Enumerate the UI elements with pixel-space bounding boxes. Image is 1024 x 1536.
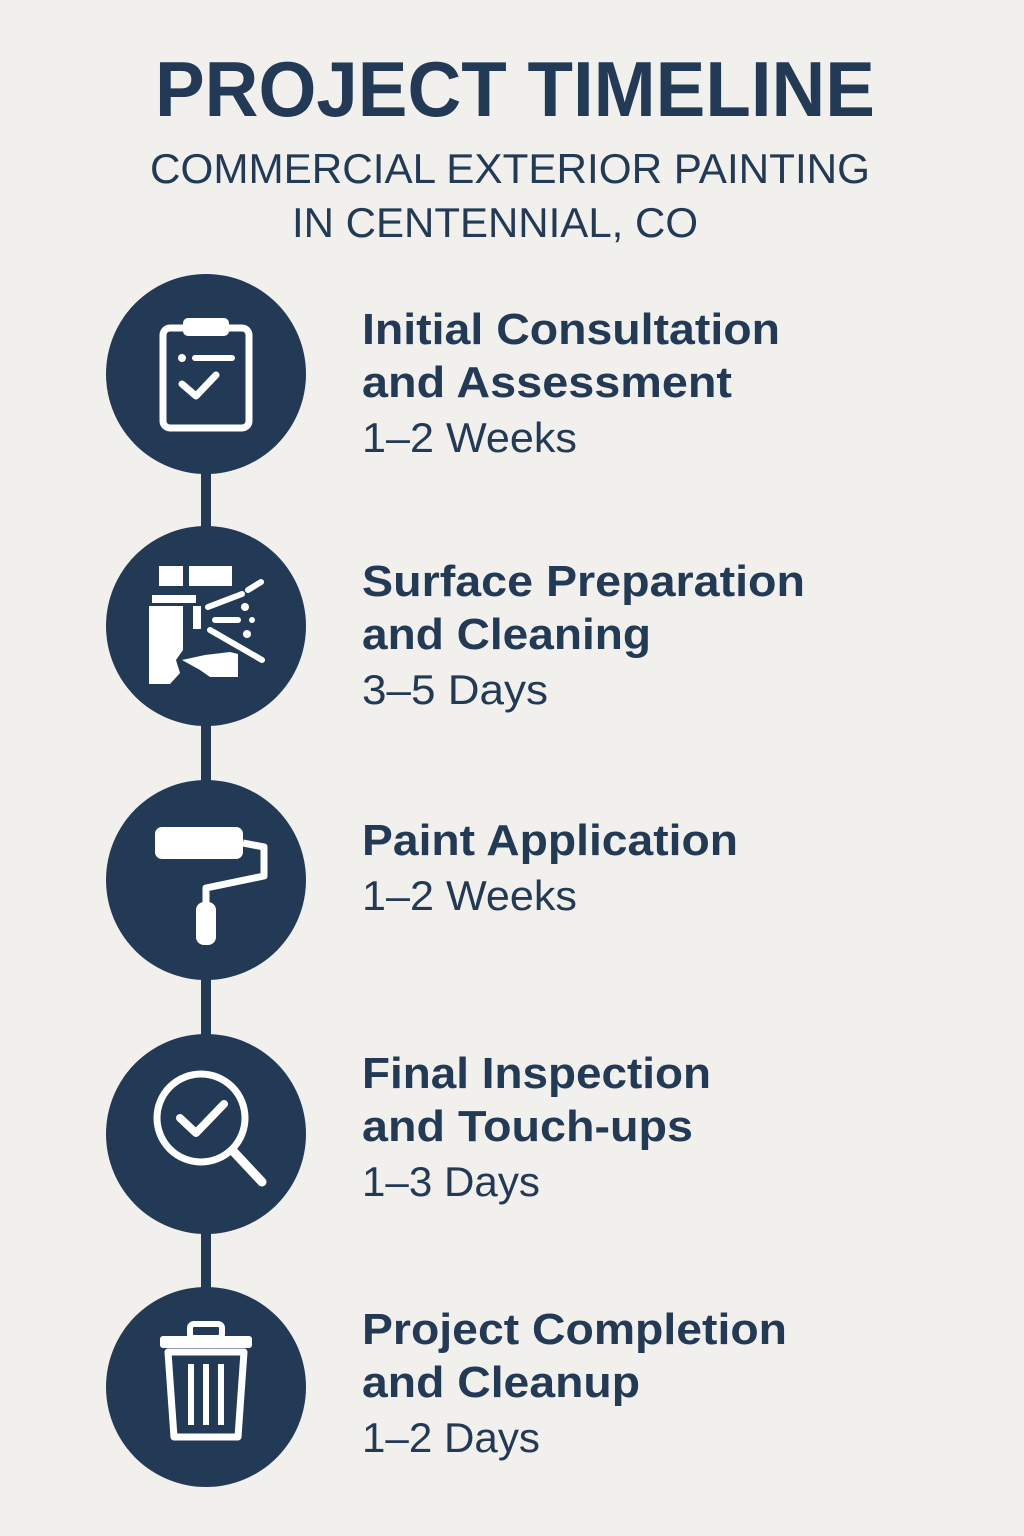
subtitle: COMMERCIAL EXTERIOR PAINTING: [150, 145, 870, 192]
step 5 text: 1–2 Days: [362, 1414, 540, 1461]
step 5 text: [362, 1305, 787, 1461]
step 5 icon: trash can: [106, 1287, 306, 1487]
step 4 text: and Touch-ups: [362, 1102, 693, 1151]
step 1 text: Initial Consultation: [362, 305, 780, 354]
step 5 text: and Cleanup: [362, 1358, 640, 1407]
step 2 text: [362, 557, 805, 713]
step 5 text: Project Completion: [362, 1305, 787, 1354]
step 1 icon: clipboard: [106, 274, 306, 474]
title: PROJECT TIMELINE: [155, 45, 875, 133]
step 1 text: 1–2 Weeks: [362, 414, 577, 461]
step 3 text: [362, 816, 738, 919]
step 3 text: 1–2 Weeks: [362, 872, 577, 919]
step 3 text: Paint Application: [362, 816, 738, 865]
step 4 icon: magnifier check: [106, 1034, 306, 1234]
step 2 text: 3–5 Days: [362, 666, 548, 713]
subtitle: IN CENTENNIAL, CO: [292, 199, 698, 246]
step 2 icon: wall cleaning: [106, 526, 306, 726]
timeline connector line: [201, 374, 211, 1387]
step 3 icon: paint roller: [106, 780, 306, 980]
step 1 text: [362, 305, 780, 461]
subtitle: [150, 145, 870, 246]
step 1 text: and Assessment: [362, 358, 732, 407]
step 4 text: [362, 1049, 711, 1205]
step 2 text: Surface Preparation: [362, 557, 805, 606]
step 4 text: 1–3 Days: [362, 1158, 540, 1205]
step 4 text: Final Inspection: [362, 1049, 711, 1098]
step 2 text: and Cleaning: [362, 610, 651, 659]
